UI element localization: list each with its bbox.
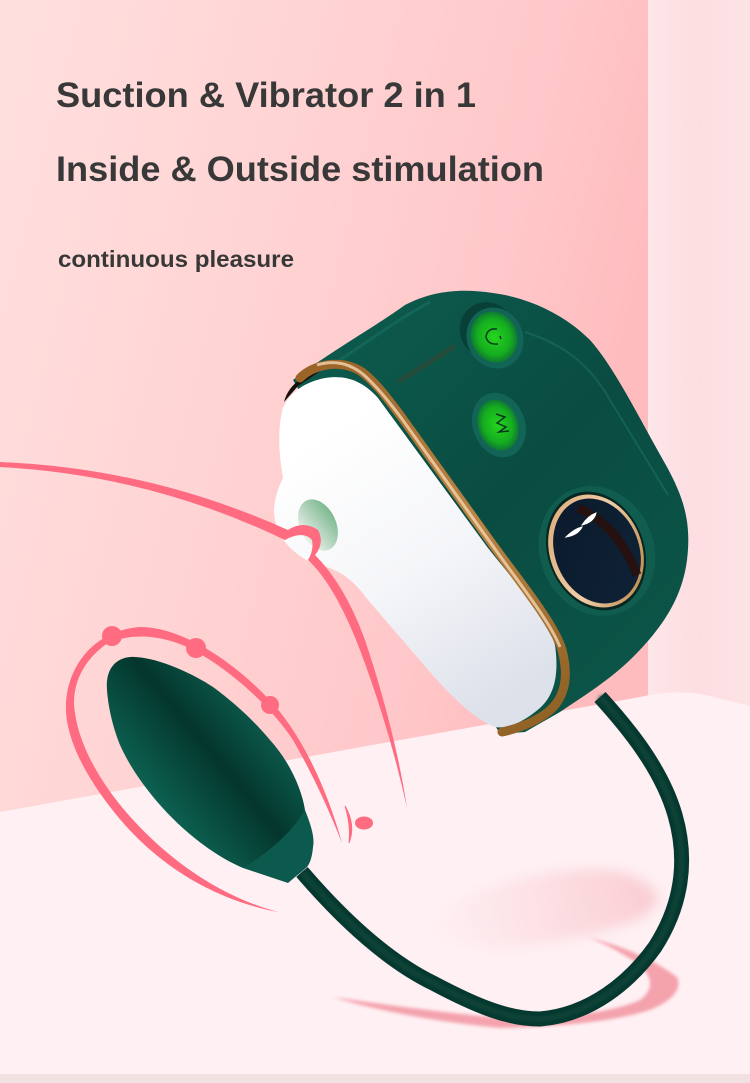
- gold rim: [300, 363, 565, 732]
- vibration mark dot: [355, 816, 373, 830]
- suction head device: [274, 291, 688, 734]
- device shell: [293, 291, 688, 734]
- pink orbit curve: egg: [66, 626, 342, 912]
- button: vibration mode: [463, 385, 535, 465]
- title line 1: Suction & Vibrator 2 in 1: [56, 76, 476, 115]
- vibration mark arc: [345, 806, 352, 843]
- display dial: [519, 468, 675, 634]
- background wall: [0, 0, 648, 830]
- floor shadows: [333, 870, 678, 1028]
- floor: [0, 692, 750, 1083]
- title line 2: Inside & Outside stimulation: [56, 150, 544, 189]
- suction nozzle: [290, 493, 346, 557]
- egg body: [107, 657, 305, 868]
- orbit dot 2: [186, 638, 206, 658]
- orbit dot 3: [261, 696, 279, 714]
- bottom strip: [0, 1074, 750, 1083]
- egg vibrator: [107, 657, 314, 883]
- shell highlight: [525, 332, 668, 495]
- dark edge by rim: [284, 368, 325, 402]
- button: suction mode: [451, 293, 533, 378]
- white silicone head: [274, 377, 556, 727]
- right wall panel: [648, 0, 750, 720]
- egg cap: [243, 810, 314, 883]
- subtitle: continuous pleasure: [58, 246, 294, 272]
- pink motion curve: suction: [0, 462, 407, 808]
- orbit dot 1: [102, 626, 122, 646]
- cord: [302, 697, 682, 1019]
